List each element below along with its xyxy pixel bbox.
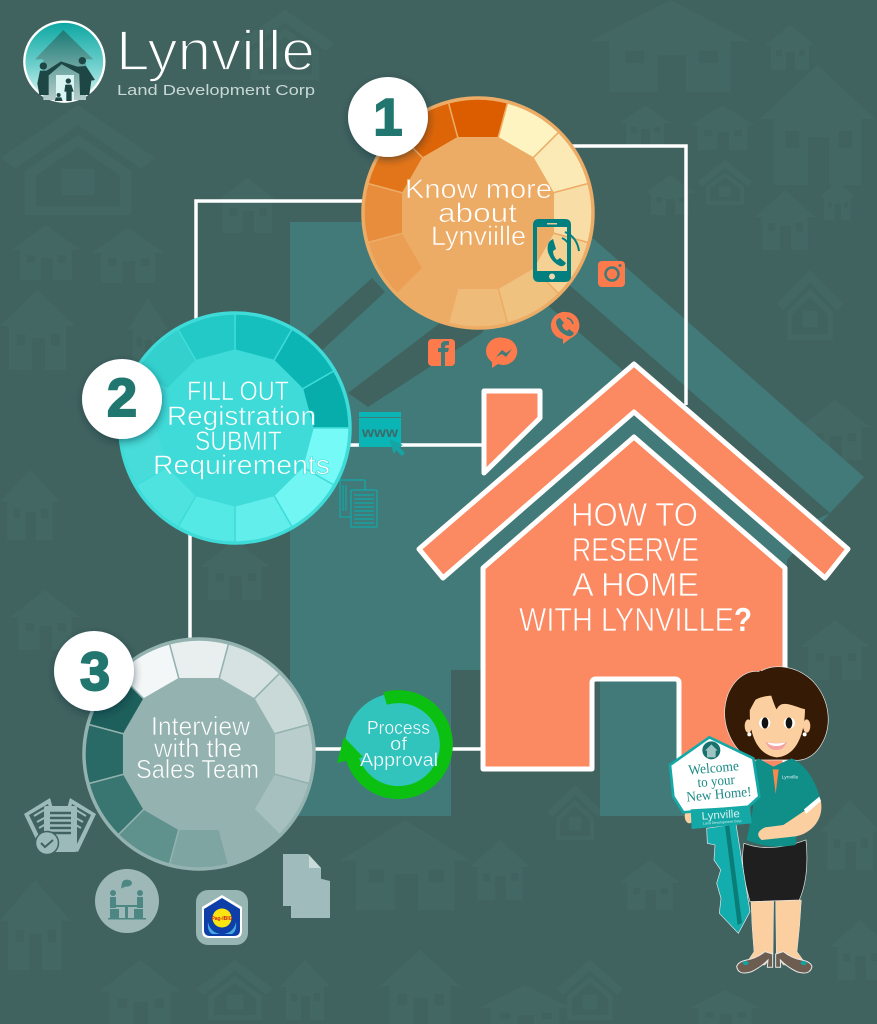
number badge 3: [54, 631, 134, 711]
logo: [24, 19, 315, 102]
arm: [758, 800, 821, 840]
wheel label: Sales Team: [136, 754, 259, 784]
step 3 wheel: [54, 631, 315, 870]
icon: meeting at a table: [95, 869, 159, 933]
main title: ?: [734, 601, 752, 638]
sleeve cuff: [804, 797, 821, 814]
step 2 wheel: [82, 310, 353, 546]
number badge 1: [348, 77, 428, 157]
neckline: [773, 769, 779, 794]
shirt logo: Lynville: [782, 774, 799, 780]
logo emblem: [24, 22, 104, 102]
shirt: [747, 758, 821, 847]
wheel label: Lynviille: [431, 221, 526, 251]
wheel label: with the: [153, 733, 242, 763]
approval label: of: [390, 734, 408, 754]
woman holding key: [670, 667, 828, 973]
icon: pag-ibig badge: [196, 890, 248, 945]
mouth: [766, 742, 787, 750]
house body: [483, 437, 785, 769]
fringe: [745, 671, 810, 710]
wheel label: SUBMIT: [195, 426, 282, 456]
number badge 2: [82, 359, 162, 439]
number badge 2: 2: [107, 368, 137, 428]
wheel segments: [83, 638, 315, 870]
shoes: [737, 952, 812, 973]
hair back: [725, 667, 828, 760]
key sign text: [683, 758, 752, 806]
wheel label: Registration: [167, 401, 316, 431]
big faded house: [290, 137, 864, 816]
key blade: [707, 824, 750, 933]
key band text: Lynville: [701, 808, 740, 823]
wheel segments: [362, 97, 594, 329]
main title: A HOME: [572, 566, 699, 603]
step 1 wheel: [348, 77, 594, 329]
icon: document pages: [283, 854, 330, 918]
eyes: [759, 717, 795, 729]
wheel label: FILL OUT: [187, 376, 289, 406]
main title: WITH LYNVILLE: [519, 601, 734, 638]
number badge 3: 3: [80, 642, 110, 702]
orange house: [419, 364, 848, 769]
icon: messenger: [486, 337, 517, 368]
wheel label: about: [438, 198, 518, 228]
number badge 1: 1: [374, 89, 402, 147]
roof: [419, 364, 848, 578]
approval disc: [345, 693, 451, 799]
main title: RESERVE: [572, 531, 699, 568]
key sign text: Welcome: [688, 759, 740, 779]
icon: phone: [533, 219, 579, 282]
wheel label: [136, 711, 259, 784]
icon: pag-ibig badge: Pag-IBIG: [211, 916, 233, 922]
icon: facebook: [428, 339, 455, 366]
icon: www browser: www: [361, 424, 398, 440]
key head: [670, 737, 759, 812]
icon: documents: [340, 480, 377, 527]
key band: [691, 806, 752, 829]
icon: fanned checklist papers: [24, 798, 96, 854]
ears and earrings: [745, 719, 810, 736]
wheel label: Interview: [151, 711, 250, 741]
icon: www browser: [359, 412, 405, 456]
connector lines: [190, 146, 686, 749]
wheel segments: [117, 310, 353, 546]
face: [750, 696, 805, 757]
key band text: Land Development Corp: [703, 819, 742, 826]
key sign text: to your: [697, 773, 736, 791]
main title: HOW TO: [571, 496, 698, 533]
approval label: Approval: [360, 750, 438, 770]
legs: [745, 900, 807, 965]
wheel label: Requirements: [153, 450, 330, 480]
icon: green cycle arrow: [337, 697, 446, 793]
process of approval: [337, 693, 451, 799]
icon: viber: [551, 312, 579, 344]
key emblem: [702, 741, 720, 759]
key sign text: New Home!: [686, 785, 752, 806]
wheel label: Know more: [405, 174, 552, 204]
approval label: [360, 718, 438, 770]
icon: instagram: [598, 261, 625, 287]
logo tagline: Land Development Corp: [117, 82, 315, 99]
wheel label: [153, 376, 330, 480]
main title: [519, 496, 752, 638]
wheel label: [405, 174, 552, 251]
approval label: Process: [367, 718, 430, 738]
skirt: [743, 840, 807, 902]
chimney: [484, 391, 540, 473]
logo wordmark: Lynville: [116, 19, 315, 83]
hand: [685, 809, 694, 823]
